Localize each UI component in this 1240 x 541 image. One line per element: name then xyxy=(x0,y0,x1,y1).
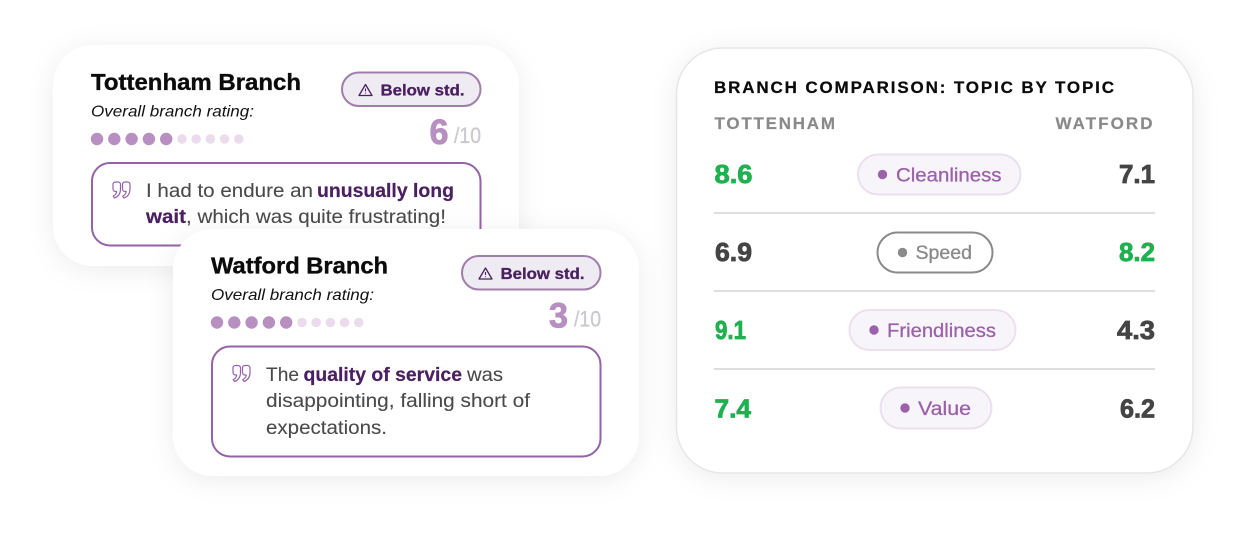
icon: quote marks xyxy=(233,366,250,382)
tag: Friendliness: Friendliness xyxy=(887,321,996,342)
score: 6 out of 10 xyxy=(430,113,481,152)
column header: Watford: WATFORD xyxy=(1056,114,1152,133)
quote text: quality of service xyxy=(304,364,462,386)
row: Value: 6.2 xyxy=(1120,396,1155,424)
panel: branch comparison xyxy=(676,48,1193,473)
row: Friendliness: 4.3 xyxy=(1117,317,1155,345)
tag: Cleanliness: Cleanliness xyxy=(896,166,1002,186)
row: Value xyxy=(714,388,1155,428)
quote text: disappointing, falling short of xyxy=(266,390,531,412)
panel: Watford Branch card xyxy=(173,229,639,476)
tag: Speed xyxy=(878,232,992,272)
row: Cleanliness xyxy=(714,154,1155,194)
tag: Value xyxy=(880,388,992,428)
badge: Below std. xyxy=(342,72,480,106)
quote text: The xyxy=(266,364,299,386)
tag: Cleanliness xyxy=(858,154,1020,194)
quote text xyxy=(145,180,454,228)
badge: Below std.: Below std. xyxy=(500,266,584,283)
quote text xyxy=(266,364,531,439)
tag: Speed: Speed xyxy=(916,243,972,264)
score: 6 out of 10: 6 xyxy=(430,113,448,152)
column header: Tottenham: TOTTENHAM xyxy=(714,114,835,133)
subheading: overall rating: Overall branch rating: xyxy=(91,104,254,120)
tag: Friendliness xyxy=(850,310,1016,350)
tag: Value: Value xyxy=(918,399,971,420)
quote text: wait xyxy=(145,206,187,228)
score: 3 out of 10: /10 xyxy=(574,306,601,332)
quote box xyxy=(212,346,600,456)
quote text: expectations. xyxy=(266,417,387,439)
quote box xyxy=(92,163,480,246)
icon: quote marks xyxy=(113,182,130,198)
subheading: overall rating: Overall branch rating: xyxy=(211,287,374,304)
heading: Tottenham Branch: Tottenham Branch xyxy=(91,69,301,95)
row: Friendliness: 9.1 xyxy=(715,317,746,345)
row: Speed: 8.2 xyxy=(1119,239,1155,267)
score: 6 out of 10: /10 xyxy=(454,123,481,148)
badge: Below std. xyxy=(462,256,600,290)
row: Speed xyxy=(715,232,1155,272)
row: Value: 7.4 xyxy=(714,396,752,424)
row: Speed: 6.9 xyxy=(715,239,752,267)
badge: Below std.: Below std. xyxy=(380,82,464,100)
row: Cleanliness: 7.1 xyxy=(1119,161,1155,189)
rating dots xyxy=(211,316,364,329)
heading: branch comparison: BRANCH COMPARISON: TOPIC BY TOPIC xyxy=(714,78,1114,97)
panel: Tottenham Branch card xyxy=(53,45,519,266)
quote text: was xyxy=(466,364,503,386)
row: Cleanliness: 8.6 xyxy=(714,161,752,189)
quote text: I had to endure an xyxy=(146,180,313,202)
rating dots xyxy=(91,133,244,145)
quote text: , which was quite frustrating! xyxy=(186,206,446,228)
heading: Watford Branch: Watford Branch xyxy=(211,252,388,278)
row: Friendliness xyxy=(715,310,1155,350)
score: 3 out of 10 xyxy=(549,296,601,336)
quote text: unusually long xyxy=(317,180,454,202)
score: 3 out of 10: 3 xyxy=(549,296,568,336)
